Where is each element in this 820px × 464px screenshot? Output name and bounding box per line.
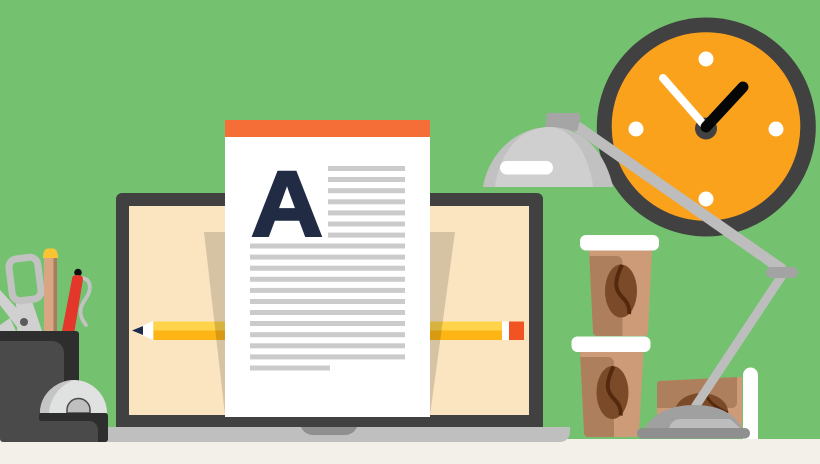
- tape core: [67, 399, 90, 413]
- bottom coffee cup: [572, 336, 650, 437]
- scissor handle: [8, 256, 42, 302]
- lamp joint: [766, 267, 798, 278]
- cup bean seam: [608, 366, 621, 416]
- hour markers: [628, 52, 784, 206]
- top coffee cup: [580, 235, 659, 336]
- scissor crossing blade upper: [0, 290, 22, 331]
- trackpad notch: [301, 427, 357, 435]
- cup lid: [572, 336, 650, 352]
- cup bean seam: [616, 265, 629, 314]
- lamp base inner: [669, 419, 740, 428]
- pencil ferrule: [502, 322, 509, 340]
- lower lamp arm: [695, 274, 783, 407]
- hour hand: [706, 87, 743, 127]
- white card behind bag: [743, 368, 758, 439]
- long text lines: [250, 244, 405, 370]
- pen tip: [74, 269, 82, 276]
- pen clip: [80, 278, 90, 325]
- scissor pivot: [20, 318, 28, 326]
- cup body: [580, 352, 644, 437]
- holder front face: [0, 341, 64, 414]
- paper shadow left: [204, 232, 240, 415]
- bag bean seam: [706, 394, 728, 413]
- pencil shaft shade: [54, 256, 57, 331]
- short text lines: [328, 166, 405, 238]
- pencil lower stripe: [154, 330, 502, 340]
- lamp base dome: [645, 405, 742, 428]
- lamp neck cap: [545, 113, 580, 131]
- pen body: [62, 275, 83, 331]
- cup body: [589, 250, 652, 336]
- laptop lid: [116, 193, 543, 427]
- lamp shade glare: [500, 161, 553, 174]
- lamp shade: [483, 127, 613, 187]
- wooden pencil: [43, 248, 58, 331]
- pencil lead: [132, 326, 143, 335]
- cup bean: [596, 366, 628, 419]
- pencil shaft: [44, 256, 57, 331]
- scissors: [0, 256, 42, 331]
- pencil on screen: [132, 321, 524, 340]
- tape roll shade: [40, 380, 74, 413]
- tape roll dome: [40, 380, 107, 413]
- cup bean: [605, 264, 637, 318]
- clock ring: [597, 18, 816, 236]
- minute hand: [663, 78, 704, 125]
- clock centre hub: [695, 118, 717, 140]
- paper shadow right: [415, 232, 455, 415]
- page header bar: [225, 120, 430, 137]
- dispenser base: [0, 413, 108, 442]
- tape dispenser: [0, 380, 108, 442]
- scissor main blade: [15, 299, 42, 331]
- page sheet: [225, 120, 430, 417]
- cup shaded side: [589, 250, 623, 336]
- large letter A: A: [251, 152, 323, 256]
- bag shaded panel: [657, 377, 737, 408]
- document page: [225, 120, 430, 417]
- pen holder with supplies: [0, 248, 108, 442]
- lamp base plate: [637, 428, 750, 438]
- coffee bag: [657, 368, 758, 439]
- red pen: [62, 269, 90, 331]
- pencil eraser: [509, 322, 524, 340]
- laptop base: [100, 427, 570, 442]
- pencil cap: [43, 248, 58, 258]
- lamp shade highlight: [495, 127, 593, 187]
- cup lid: [580, 235, 659, 250]
- cup shaded side: [580, 352, 614, 437]
- laptop screen: [129, 206, 529, 415]
- desk surface: [0, 439, 820, 464]
- clock face: [612, 32, 800, 221]
- pencil wood tip: [132, 321, 153, 340]
- laptop: [100, 193, 570, 442]
- bag body: [657, 377, 742, 428]
- clock: [597, 18, 816, 236]
- desk lamp: [483, 113, 798, 438]
- pencil upper stripe: [154, 322, 502, 330]
- upper lamp arm: [577, 126, 783, 270]
- scissor crossing blade lower: [0, 318, 16, 331]
- holder body: [0, 331, 79, 385]
- bag bean: [675, 393, 728, 431]
- dispenser top strip: [39, 413, 108, 442]
